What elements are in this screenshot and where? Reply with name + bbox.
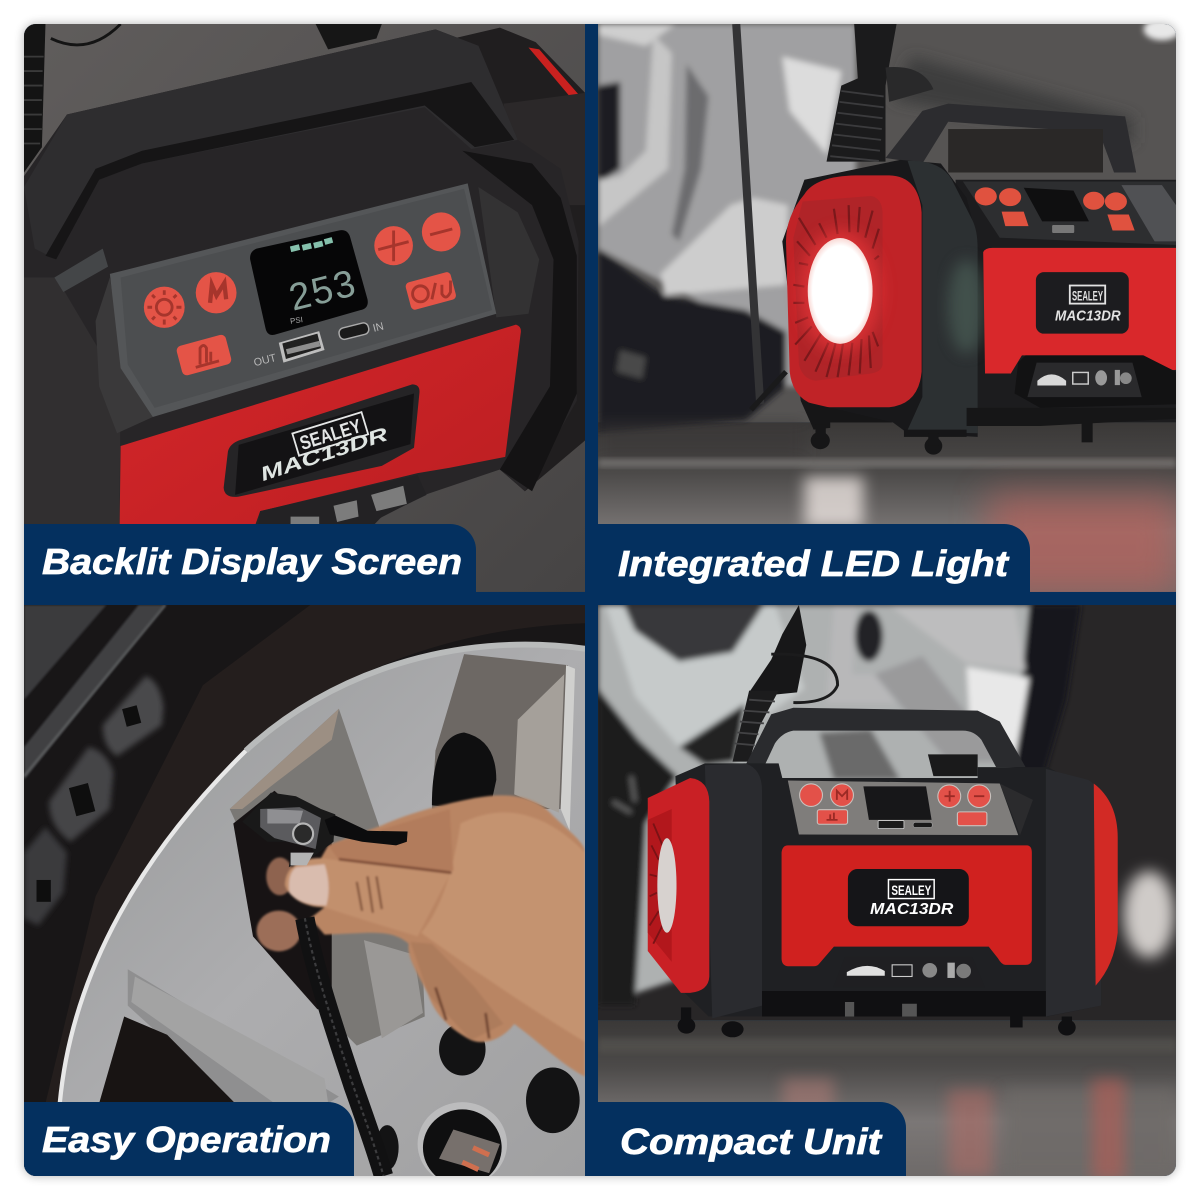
red end cap (786, 175, 922, 407)
logo badge: SEALEY (891, 882, 932, 898)
caption: Backlit Display Screen (24, 524, 476, 592)
caption: Easy Operation (24, 1102, 354, 1176)
blurred wheel (598, 605, 1081, 1006)
panel: integrated LED light (598, 19, 1180, 596)
floor reflections (602, 421, 794, 432)
caption: Integrated LED Light: Integrated LED Light (618, 543, 1010, 584)
logo badge: SEALEY (297, 415, 364, 455)
red end cap: left (648, 778, 709, 993)
red panel (782, 845, 1032, 966)
USB ports: IN (372, 320, 385, 335)
rear body (458, 28, 585, 492)
logo badge: MAC13DR (258, 423, 390, 486)
USB ports (878, 821, 904, 829)
icon: LED lens (657, 838, 677, 933)
handle (745, 708, 1026, 767)
hose (733, 605, 838, 762)
hose spring (24, 24, 382, 173)
red panel (983, 248, 1176, 374)
tyre tread (24, 605, 165, 925)
divider: vertical navy bar (585, 24, 598, 1176)
caption: Backlit Display Screen: Backlit Display Screen (42, 541, 462, 582)
tyre shoulder (45, 605, 585, 1103)
red end cap: right (1094, 783, 1118, 986)
buttons (975, 187, 1135, 230)
logo badge: MAC13DR (1055, 308, 1121, 324)
buttons (800, 784, 991, 826)
panel: compact unit (598, 605, 1177, 1180)
handle (886, 104, 1136, 173)
wheel window: upper right (432, 654, 568, 809)
LED glow (799, 229, 881, 353)
logo badge (848, 869, 969, 926)
vent recess (793, 196, 883, 381)
logo badge: MAC13DR (870, 901, 953, 918)
caption: Compact Unit (598, 1102, 906, 1176)
panel: easy operation (24, 605, 585, 1186)
caption: Compact Unit: Compact Unit (620, 1121, 883, 1162)
compressor body (24, 30, 524, 524)
logo badge (1036, 272, 1129, 334)
main body (956, 180, 1176, 422)
icon: LED light (808, 238, 873, 344)
divider: horizontal navy bar (24, 592, 1176, 605)
caption: Easy Operation: Easy Operation (42, 1119, 331, 1160)
grey control panel (110, 183, 496, 417)
mode label strip (833, 956, 985, 987)
USB ports: OUT (253, 352, 278, 369)
panel: backlit display screen (24, 24, 585, 592)
hose (305, 918, 384, 1176)
icon: display: 253 (285, 262, 359, 320)
air chuck (260, 792, 408, 868)
feet (801, 401, 1176, 455)
lower spoke (128, 969, 339, 1103)
control panel (788, 781, 1018, 835)
base and feet (678, 991, 1076, 1037)
caption: Integrated LED Light (598, 524, 1030, 592)
red panel (120, 324, 521, 524)
mode label strip (1015, 355, 1176, 408)
icon: display (250, 230, 368, 335)
wheel window: centre pocket (230, 709, 425, 1046)
cap surround (782, 160, 978, 437)
logo badge: SEALEY (1072, 288, 1103, 304)
icon: display: PSI (290, 315, 303, 326)
handle (66, 30, 498, 115)
logo badge (224, 384, 419, 497)
hose (827, 24, 933, 162)
top right background (893, 57, 1132, 144)
rim (60, 645, 585, 1176)
floor reflections (598, 1038, 1176, 1053)
USB ports (253, 320, 385, 369)
display (863, 786, 932, 820)
hand (257, 795, 585, 1077)
wheel holes (439, 1023, 486, 1076)
blurred wheel (598, 24, 856, 433)
body (675, 763, 1101, 1017)
buttons (144, 212, 461, 376)
